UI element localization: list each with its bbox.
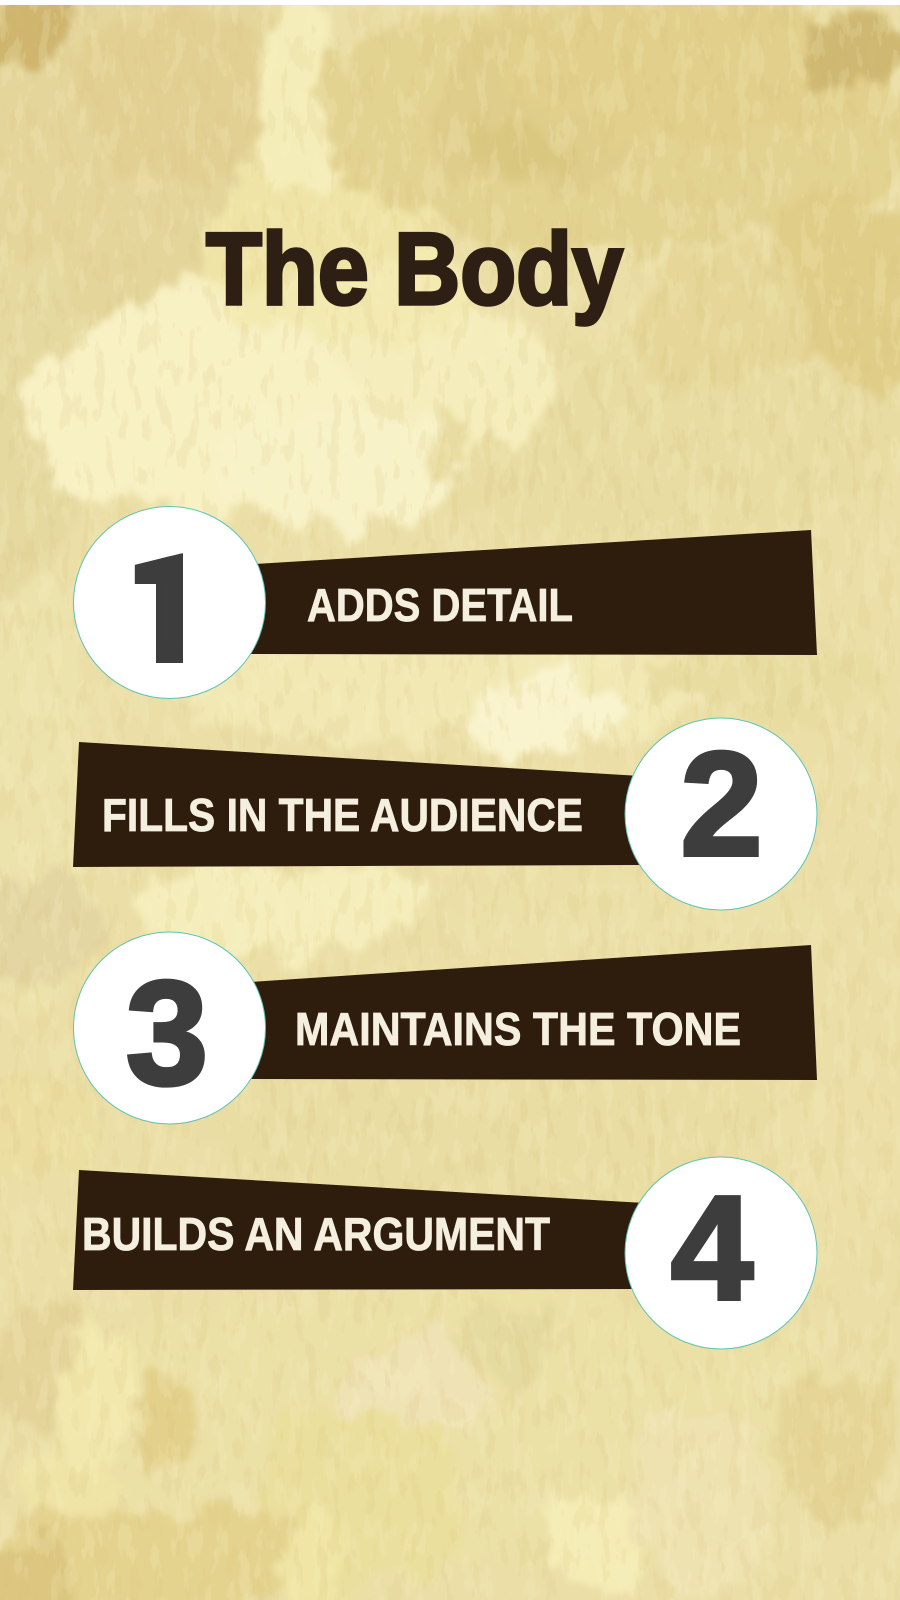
label: fills in the audience: FILLS IN THE AUDIENCE xyxy=(102,789,583,841)
label: builds an argument: BUILDS AN ARGUMENT xyxy=(82,1208,550,1260)
item 3: maintains the tone xyxy=(74,932,817,1124)
number 3: 3 xyxy=(126,951,208,1116)
number 1: 1 xyxy=(123,493,213,706)
item 4: builds an argument xyxy=(73,1157,817,1349)
circle 3 xyxy=(74,932,266,1124)
item 1: adds detail xyxy=(74,493,817,706)
label: maintains the tone: MAINTAINS THE TONE xyxy=(295,1003,741,1055)
title: The Body xyxy=(206,212,623,326)
item 2: fills in the audience xyxy=(73,718,817,910)
number 2: 2 xyxy=(680,722,763,887)
banner 4 xyxy=(73,1170,645,1290)
banner 3 xyxy=(245,945,817,1080)
banner 1 xyxy=(245,530,817,655)
circle 1 xyxy=(74,506,266,698)
circle 2 xyxy=(625,718,817,910)
label: adds detail: ADDS DETAIL xyxy=(307,579,573,631)
circle 4 xyxy=(625,1157,817,1349)
number 4: 4 xyxy=(671,1166,753,1331)
banner 2 xyxy=(73,742,645,867)
